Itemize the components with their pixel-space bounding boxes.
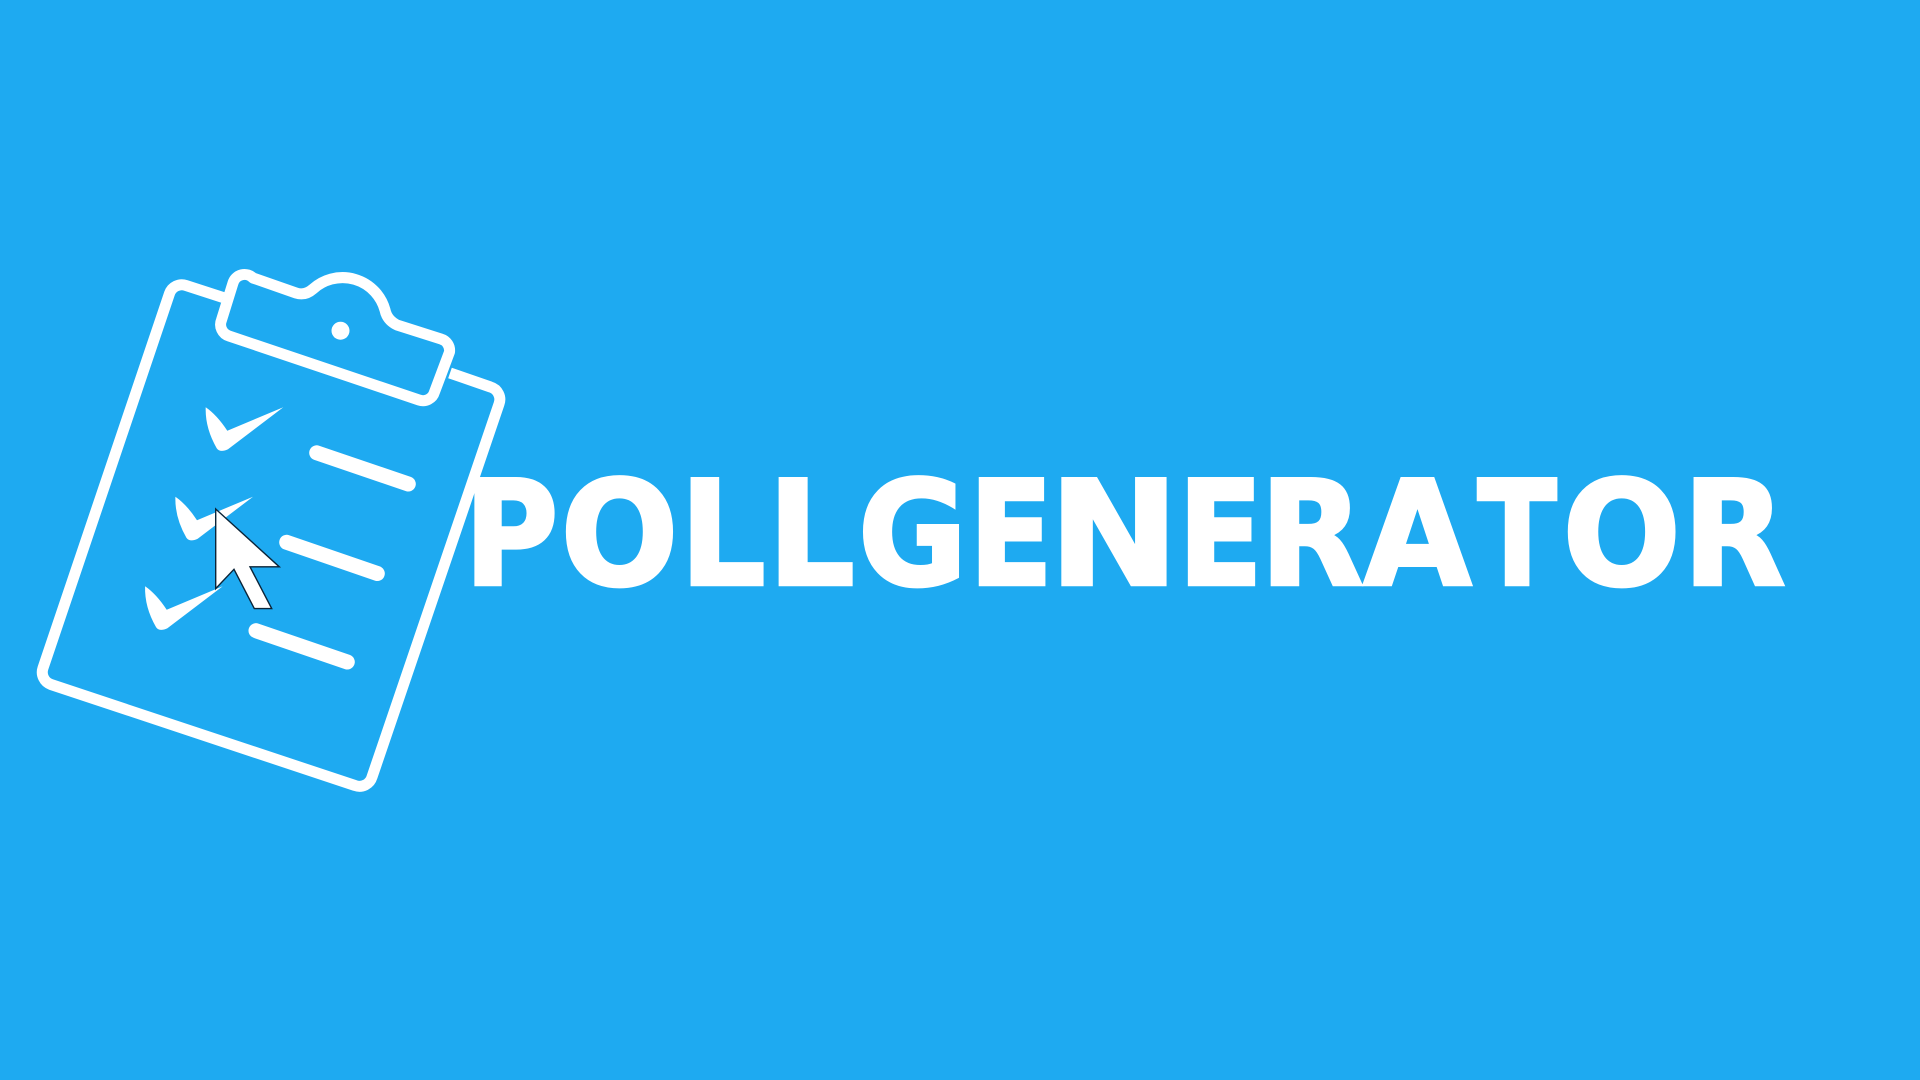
icon: check mark 1 [206,407,283,451]
title: POLLGENERATOR: O [1563,450,1681,620]
title: POLLGENERATOR: P [464,450,558,620]
checklist line 2 [287,542,377,574]
checklist line 1 [317,453,408,484]
clipboard clip [221,274,450,401]
title: POLLGENERATOR: L [680,450,766,620]
title: POLLGENERATOR: R [1260,450,1363,620]
title: POLLGENERATOR: N [1049,450,1179,620]
icon: mouse cursor [216,509,279,609]
title: POLLGENERATOR: L [768,450,855,620]
title: POLLGENERATOR: O [561,450,678,620]
icon: check mark 3 [145,586,223,630]
title: POLLGENERATOR: A [1364,450,1471,620]
title: POLLGENERATOR: E [1178,450,1263,620]
title: POLLGENERATOR: E [969,450,1053,620]
title: POLLGENERATOR: G [858,450,967,620]
icon: check mark 2 [175,497,253,540]
checklist line 3 [256,631,347,662]
title: POLLGENERATOR: R [1683,450,1785,620]
clipboard board outline [42,285,500,786]
title: POLLGENERATOR: T [1478,450,1557,620]
icon: clipboard checklist [42,274,500,786]
clip hole [332,322,350,340]
